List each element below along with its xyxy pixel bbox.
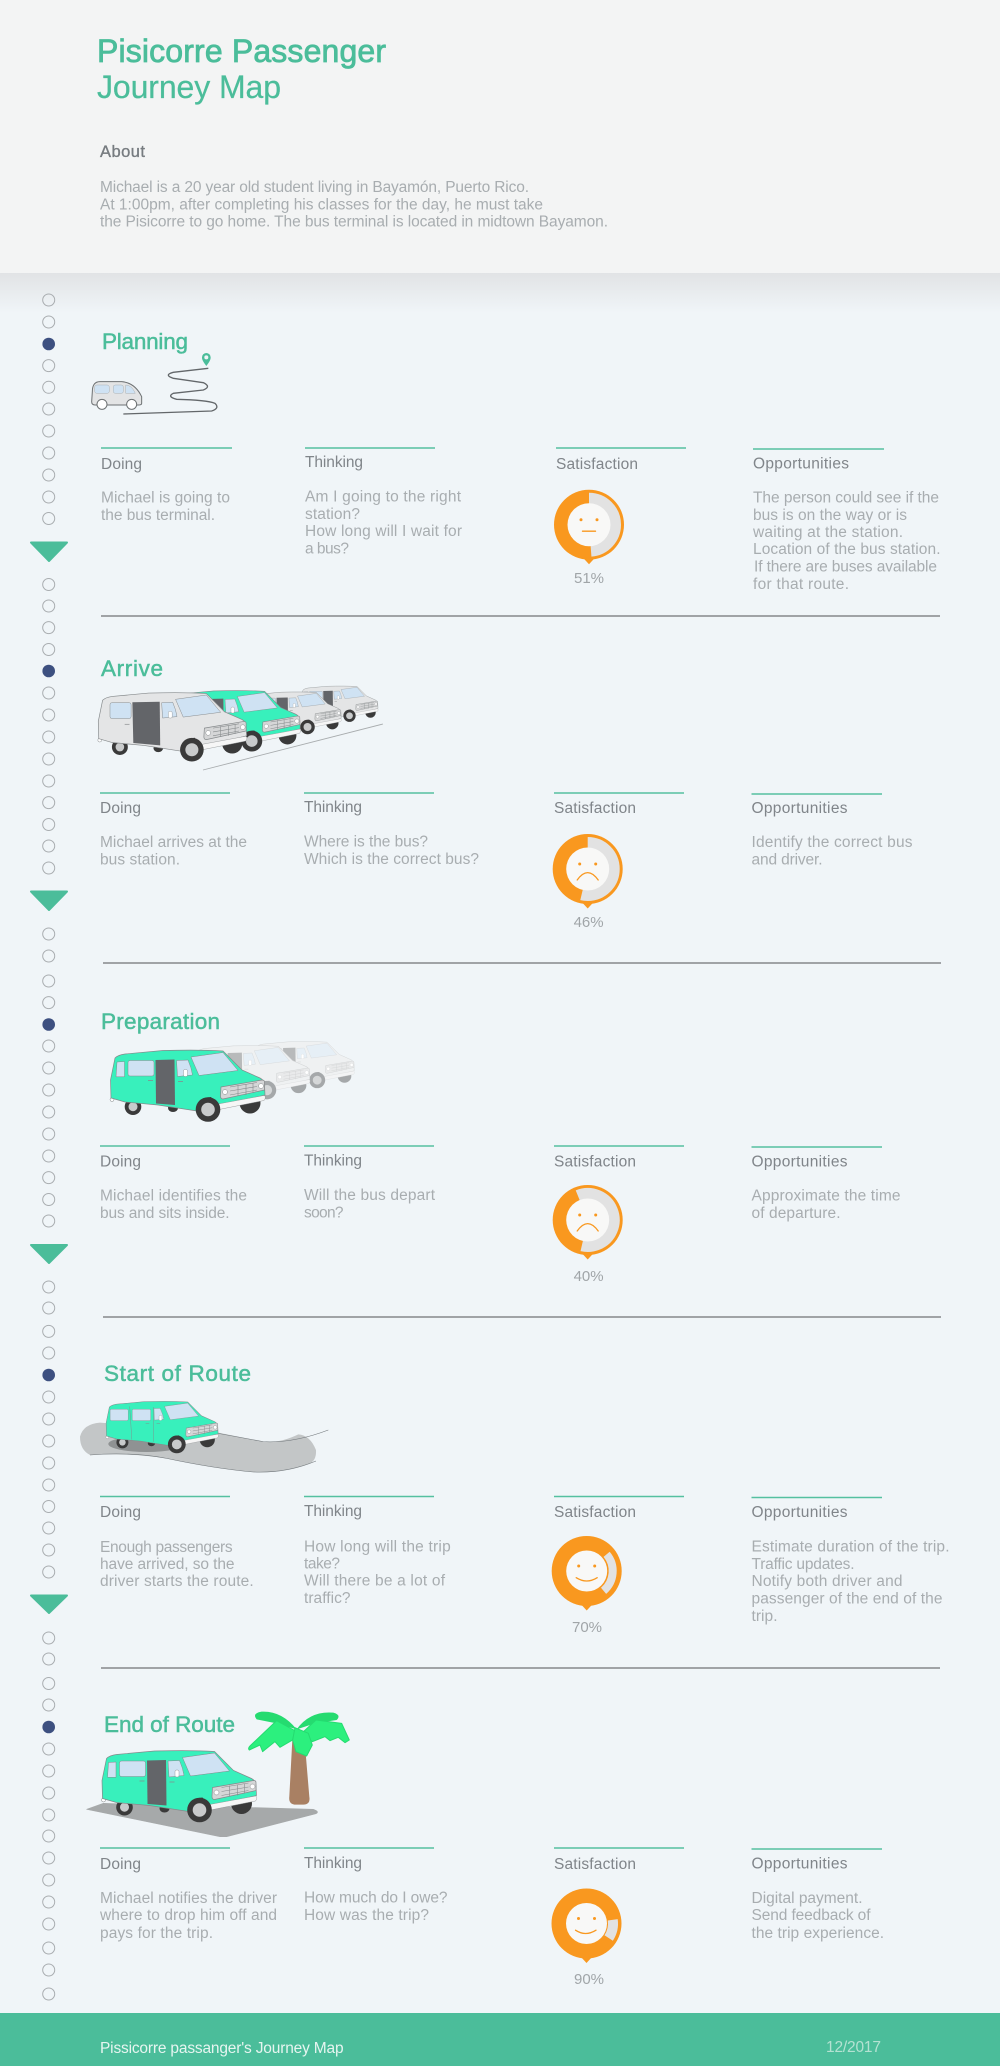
column: thinking: Thinking [305,454,363,471]
gauge: 40% sad face [553,1185,623,1260]
column: satisfaction [553,1146,684,1285]
column: opportunities: Notify both driver and [752,1573,902,1590]
column: doing: where to drop him off and [99,1907,277,1924]
column: satisfaction [554,448,686,587]
column: thinking: take? [304,1556,340,1572]
column: doing: pays for the trip. [100,1925,213,1942]
column: thinking: a bus? [305,540,349,558]
column: opportunities: waiting at the station. [752,524,903,541]
column: opportunities: Digital payment. [752,1890,862,1907]
column: satisfaction [550,1496,684,1636]
column: thinking: Thinking [304,799,362,816]
column: doing: Michael notifies the driver [100,1890,277,1907]
panel: preparation [100,1009,900,1285]
column: doing [100,1496,254,1590]
percentage: 46% [574,914,604,931]
column: doing: Doing [100,1856,141,1873]
percentage: 40% [574,1268,604,1285]
column: opportunities: of departure. [752,1205,840,1222]
column: opportunities: Estimate duration of the trip. [752,1538,950,1556]
column: opportunities: the trip experience. [752,1925,884,1942]
panel: arrive [98,656,913,931]
column: doing: bus station. [100,852,180,868]
heading: arrive: Arrive [101,656,163,681]
column: doing: Michael identifies the [100,1188,247,1204]
panel: planning [92,329,940,593]
column: opportunities: Opportunities [752,800,848,817]
percentage: 70% [572,1619,602,1636]
panel: start of route [80,1361,950,1636]
column: thinking [304,1848,448,1924]
column: opportunities: trip. [752,1608,778,1625]
column: thinking [305,448,462,558]
gauge: 51% neutral face [554,490,624,564]
column: thinking: How much do I owe? [304,1890,448,1906]
about text: the Pisicorre to go home. The bus terminal is located in midtown Bayamon. [100,214,608,230]
about heading: About [100,143,145,161]
footer date: 12/2017 [826,2039,881,2056]
column: doing: Michael arrives at the [100,834,247,851]
column: thinking: Where is the bus? [304,834,428,850]
heading: preparation: Preparation [101,1009,220,1034]
column: satisfaction [553,793,684,931]
panel: end of route [87,1712,884,1988]
column: doing: driver starts the route. [100,1573,254,1590]
gauge: 70% happy face [550,1534,623,1610]
column: opportunities: Approximate the time [752,1188,900,1204]
column: doing: the bus terminal. [101,507,215,524]
title: Pisicorre Passenger [97,33,386,69]
column: thinking [304,793,479,868]
column: opportunities [752,449,940,593]
column: satisfaction: Satisfaction [554,1504,636,1521]
heading: start of route: Start of Route [104,1361,251,1386]
column: satisfaction: Satisfaction [554,1856,636,1873]
column: opportunities: and driver. [752,852,822,868]
column: doing [101,448,232,524]
heading: planning: Planning [102,329,188,354]
column: thinking: traffic? [304,1590,351,1607]
column: thinking: Thinking [304,1152,362,1170]
column: satisfaction: Satisfaction [554,800,636,817]
title [97,33,386,105]
column: thinking: Will the bus depart [304,1187,436,1204]
gauge: 90% happy face [552,1888,622,1963]
column: thinking: Which is the correct bus? [304,851,479,868]
column: doing: Doing [100,800,141,817]
column: thinking: How long will I wait for [305,523,462,540]
column: thinking: soon? [304,1204,344,1222]
title: Journey Map [97,69,281,105]
column: opportunities: passenger of the end of the [752,1590,942,1608]
column: opportunities: Opportunities [752,1154,848,1170]
percentage: 90% [574,1971,604,1988]
about text: Michael is a 20 year old student living in Bayamón, Puerto Rico. [100,179,529,196]
column: opportunities: The person could see if the [753,490,939,506]
column: satisfaction [552,1848,684,1988]
column: opportunities: Location of the bus station. [753,541,940,558]
column: doing [100,1146,247,1222]
timeline [31,294,67,2000]
column: thinking: Will there be a lot of [304,1572,446,1590]
column: opportunities: Send feedback of [752,1907,871,1924]
column: doing: Michael is going to [101,490,230,506]
column: thinking: Am I going to the right [305,488,462,506]
heading: end of route: End of Route [104,1712,235,1737]
column: opportunities: Identify the correct bus [752,834,913,851]
column: thinking [304,1146,436,1222]
column: opportunities: Traffic updates. [752,1556,854,1573]
column: opportunities: If there are buses available [754,559,937,576]
column: doing: have arrived, so the [100,1556,234,1573]
footer [0,2013,1000,2066]
column: opportunities [752,1498,950,1625]
illustration: van beside palm tree [87,1712,349,1837]
illustration: row of vans [98,686,383,770]
column: doing: Doing [100,1504,141,1521]
column: opportunities: Opportunities [752,1856,848,1872]
icon: bus and winding route [92,353,217,414]
column: opportunities: Opportunities [753,456,849,472]
column: satisfaction: Satisfaction [556,456,638,473]
percentage: 51% [574,570,604,587]
column: thinking: How long will the trip [304,1538,451,1556]
about text [100,179,608,230]
column: thinking: Thinking [304,1503,362,1520]
column: satisfaction: Satisfaction [554,1154,636,1170]
column: thinking [304,1496,451,1607]
column: opportunities: bus is on the way or is [753,507,907,524]
column: thinking: station? [305,506,360,523]
column: doing: bus and sits inside. [100,1205,230,1222]
column: opportunities: for that route. [753,576,849,593]
illustration: van on winding road [80,1401,328,1472]
column: thinking: How was the trip? [304,1907,429,1924]
about text: At 1:00pm, after completing his classes for the day, he must take [100,196,543,214]
column: doing: Doing [100,1154,141,1170]
column: thinking: Thinking [304,1855,362,1872]
column: opportunities [752,794,913,868]
gauge: 46% sad face [553,834,623,908]
column: opportunities: Opportunities [752,1504,848,1521]
footer title: Pissicorre passanger's Journey Map [100,2040,344,2057]
column: doing [100,793,247,868]
header panel [0,0,1000,273]
column: doing: Doing [101,456,142,473]
column: doing: Enough passengers [100,1539,233,1556]
illustration: green van in front of faded vans [110,1042,354,1122]
column: doing [99,1848,277,1942]
column: opportunities [752,1147,900,1222]
column: opportunities [752,1849,884,1942]
